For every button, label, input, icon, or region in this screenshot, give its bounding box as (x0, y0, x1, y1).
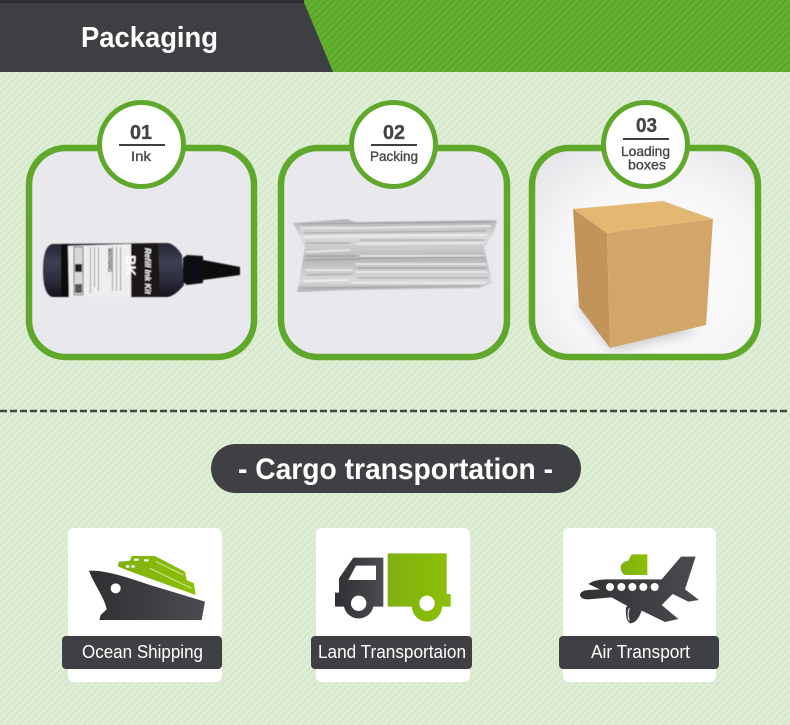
bottle label text: BK (123, 255, 139, 276)
card: Air Transport (559, 528, 719, 682)
bottle label text: WARNING (106, 248, 112, 272)
badge: 03 Loading boxes: boxes (628, 156, 666, 172)
heading pill: Cargo transportation: - Cargo transportation - (238, 453, 553, 486)
badge: 02 Packing: 02 (383, 122, 405, 144)
label: Land Transportaion: Land Transportaion (318, 642, 466, 662)
label: Air Transport: Air Transport (591, 642, 690, 662)
badge: 02 Packing: Packing (370, 149, 418, 164)
badge: 01 Ink: Ink (131, 149, 151, 164)
icon: cardboard box (573, 201, 713, 350)
header banner (0, 0, 790, 72)
label: Ocean Shipping: Ocean Shipping (82, 642, 203, 662)
badge: 03 Loading boxes: Loading (621, 143, 670, 159)
icon: plane (580, 554, 699, 623)
icon: ink bottle (43, 243, 240, 297)
label: Air Transport (559, 636, 719, 669)
badge: 01 Ink (100, 102, 184, 186)
badge: 01 Ink: 01 (130, 122, 152, 144)
card: Land Transportaion (311, 528, 472, 682)
panel: 03 Loading boxes (532, 148, 758, 357)
icon: ship (89, 556, 205, 620)
label: Ocean Shipping (62, 636, 222, 669)
icon: truck (335, 553, 451, 622)
heading: Packaging: Packaging (81, 22, 218, 54)
heading pill: Cargo transportation (211, 444, 581, 493)
panel: 02 Packing (281, 148, 507, 357)
badge: 03 Loading boxes: 03 (636, 115, 657, 137)
label: Land Transportaion (311, 636, 472, 669)
icon: air column bag (293, 219, 497, 292)
bottle label text: Refill Ink Kit (143, 248, 153, 295)
bottle label text (106, 248, 153, 295)
panel: 01 Ink (29, 148, 254, 357)
card: Ocean Shipping (62, 528, 222, 682)
badge: 03 Loading boxes (604, 102, 688, 186)
badge: 02 Packing (352, 102, 436, 186)
